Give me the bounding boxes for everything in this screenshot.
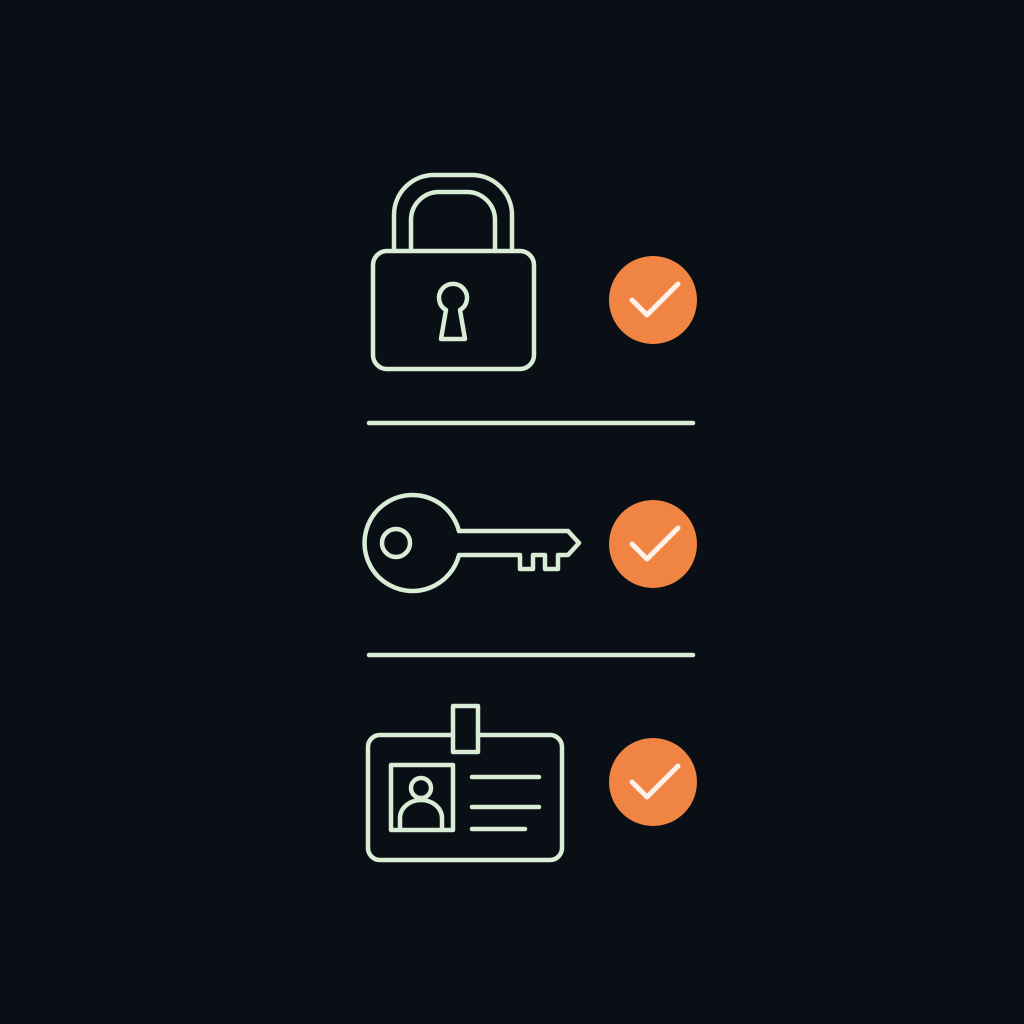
check badge 2	[609, 500, 697, 588]
icon: padlock	[373, 175, 534, 369]
check badge 3	[609, 738, 697, 826]
check badge 1	[609, 256, 697, 344]
icon: key	[365, 495, 579, 591]
divider 2	[369, 653, 693, 657]
divider 1	[369, 421, 693, 425]
icon: ID card	[368, 706, 562, 860]
